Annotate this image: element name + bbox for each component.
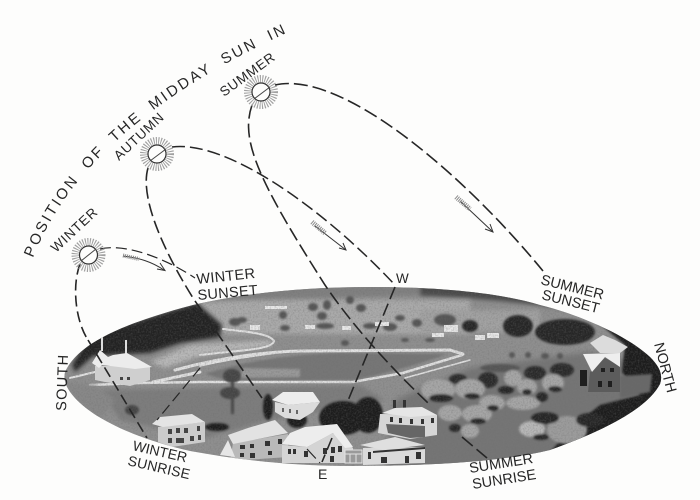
house: right two-storey xyxy=(378,400,437,439)
sun: winter xyxy=(76,242,102,268)
white track lines xyxy=(69,328,471,386)
dashed path: summer sun xyxy=(249,83,543,458)
distant dark tree groups xyxy=(462,315,595,345)
label: winter: WINTER xyxy=(48,204,101,255)
dark trees around the centre houses xyxy=(205,394,383,435)
arrow: autumn xyxy=(312,222,346,250)
dashed line: west to east xyxy=(322,287,395,462)
label: west: W xyxy=(396,271,409,286)
left lawn under the trees xyxy=(150,340,272,368)
house: gabled front xyxy=(282,424,353,463)
label: summer sunrise: SUMMER xyxy=(468,451,534,477)
label: summer sunset: SUMMER xyxy=(539,272,605,303)
hillside trees xyxy=(229,296,456,346)
lone tree xyxy=(125,369,241,415)
label: north: NORTH xyxy=(650,341,679,395)
distant small houses xyxy=(250,306,499,340)
dark tree line, left xyxy=(72,303,222,372)
label: winter sunset second line: SUNSET xyxy=(197,283,259,304)
house: south pavilion xyxy=(92,337,152,386)
title: position of the midday sun in: POSITION OF THE MIDDAY SUN IN xyxy=(24,24,285,257)
label: summer sunrise second line: SUNRISE xyxy=(471,467,538,493)
label: winter sunrise second line: SUNRISE xyxy=(126,452,192,482)
sun: autumn xyxy=(144,141,170,167)
orchard ground xyxy=(385,352,670,470)
grain xyxy=(60,285,670,470)
south-west corner xyxy=(66,384,112,418)
arrow: winter xyxy=(123,256,165,270)
label: winter sunrise: WINTER xyxy=(131,437,189,465)
house: centre back xyxy=(272,392,320,420)
north lawn xyxy=(620,374,652,398)
dashed path: autumn sun xyxy=(146,146,395,463)
dashed path: winter sun xyxy=(76,248,200,438)
photo: landscape oval xyxy=(60,283,670,470)
upper hillside fields xyxy=(200,287,560,336)
house: winter sunrise xyxy=(152,414,205,447)
house: low front xyxy=(360,437,425,465)
porch xyxy=(345,450,362,463)
label: summer: SUMMER xyxy=(217,49,278,99)
label: east: E xyxy=(318,466,327,482)
lower field xyxy=(100,385,385,438)
orchard bushes xyxy=(421,352,604,444)
label: south: SOUTH xyxy=(54,353,72,411)
house: north mansion xyxy=(580,335,628,392)
far right dark trees xyxy=(550,326,662,450)
house: long white front xyxy=(220,420,288,461)
label: winter sunset: WINTER xyxy=(196,266,256,288)
label: summer sunset second line: SUNSET xyxy=(540,287,601,317)
sun: summer xyxy=(248,79,274,105)
arrow: summer xyxy=(456,197,493,232)
track infield xyxy=(205,353,447,381)
label: autumn: AUTUMN xyxy=(111,109,167,163)
